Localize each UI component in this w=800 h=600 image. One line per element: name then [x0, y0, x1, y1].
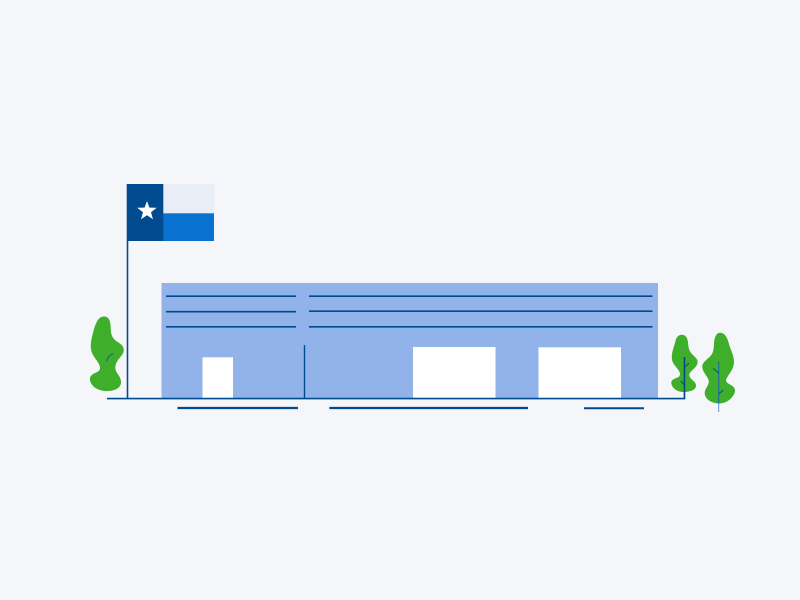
flag canton [127, 184, 163, 241]
roof lines left [166, 296, 296, 327]
tree trunk lower [718, 404, 720, 412]
tree trunk [718, 361, 720, 404]
garage door right [538, 347, 621, 398]
wall divider [304, 345, 306, 398]
icon: left tree [90, 316, 124, 391]
icon: star [137, 201, 157, 219]
icon: flag [127, 184, 214, 241]
tree branch [106, 354, 113, 362]
tree branches [681, 363, 689, 385]
flag pole [126, 184, 128, 398]
building wall [162, 283, 658, 398]
panel: building [162, 283, 658, 398]
flag upper stripe [163, 184, 214, 213]
ground strokes [178, 407, 644, 409]
ground line [107, 357, 684, 399]
tree trunk [683, 357, 685, 398]
tree branches [713, 368, 723, 394]
garage door left [413, 347, 496, 398]
flag lower stripe [163, 213, 214, 241]
door [202, 357, 233, 398]
roof lines right [309, 296, 652, 327]
icon: middle tree [671, 335, 698, 398]
icon: right tree [702, 333, 735, 412]
